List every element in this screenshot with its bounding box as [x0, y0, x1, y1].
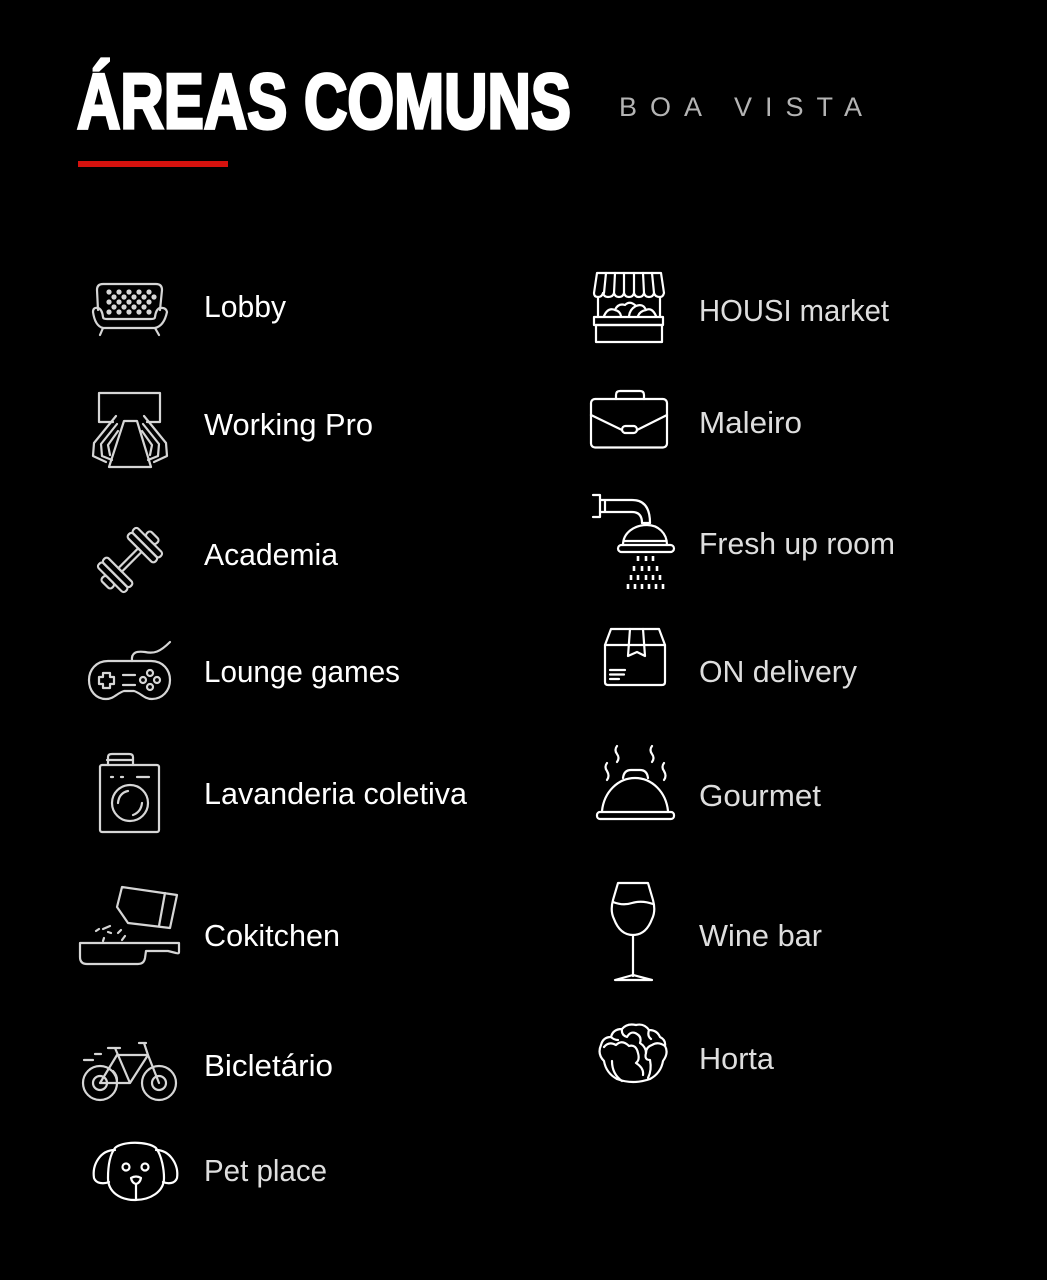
icon: desk with keyboard and hands: [93, 393, 167, 467]
subtitle: BOA VISTA: [619, 92, 862, 122]
item: Cokitchen: [80, 887, 340, 964]
title: ÁREAS COMUNS: [77, 57, 571, 145]
item: ON delivery: [605, 629, 858, 689]
item: Gourmet: [597, 746, 822, 819]
icon: briefcase: [591, 391, 667, 448]
item: HOUSI market: [594, 273, 890, 342]
icon: lettuce: [600, 1024, 667, 1082]
item: Pet place: [94, 1143, 327, 1200]
label: Pet place: Pet place: [204, 1154, 327, 1188]
item: Lavanderia coletiva: [100, 754, 467, 832]
label: Academia: Academia: [204, 538, 338, 572]
icon: dumbbell: [92, 522, 168, 598]
label: Cokitchen: Cokitchen: [204, 919, 340, 953]
label: Bicletário: Bicletário: [204, 1049, 333, 1083]
item: Maleiro: [591, 391, 802, 448]
icon: wine glass: [612, 883, 654, 980]
item: Lobby: [93, 284, 287, 335]
label: Fresh up room: Fresh up room: [699, 527, 895, 561]
icon: food cloche: [597, 746, 674, 819]
icon: shower: [593, 495, 674, 589]
label: Lobby: Lobby: [204, 290, 287, 324]
item: Fresh up room: [593, 495, 895, 589]
icon: package: [605, 629, 665, 685]
label: Lounge games: Lounge games: [204, 655, 400, 689]
panel: right column: [591, 273, 895, 1082]
panel: left column: [80, 284, 467, 1200]
label: Working Pro: Working Pro: [204, 408, 373, 442]
icon: sofa: [93, 284, 167, 335]
label: Maleiro: Maleiro: [699, 406, 802, 440]
label: HOUSI market: HOUSI market: [699, 294, 890, 328]
item: Wine bar: [612, 883, 822, 980]
item: Bicletário: [83, 1043, 333, 1100]
item: Academia: [92, 522, 338, 598]
icon: market stall: [594, 273, 664, 342]
icon: game controller: [89, 642, 170, 699]
label: Gourmet: Gourmet: [699, 779, 822, 813]
icon: dog: [94, 1143, 177, 1200]
item: Working Pro: [93, 393, 373, 467]
item: Horta: [600, 1024, 774, 1082]
label: ON delivery: ON delivery: [699, 655, 858, 689]
icon: pouring into pan: [80, 887, 179, 964]
icon: washing machine: [100, 754, 159, 832]
label: Wine bar: Wine bar: [699, 919, 822, 953]
icon: bicycle: [83, 1043, 176, 1100]
label: Lavanderia coletiva: Lavanderia coletiva: [204, 777, 467, 811]
label: Horta: Horta: [699, 1042, 774, 1076]
item: Lounge games: [89, 642, 400, 699]
red accent bar: [78, 161, 228, 167]
